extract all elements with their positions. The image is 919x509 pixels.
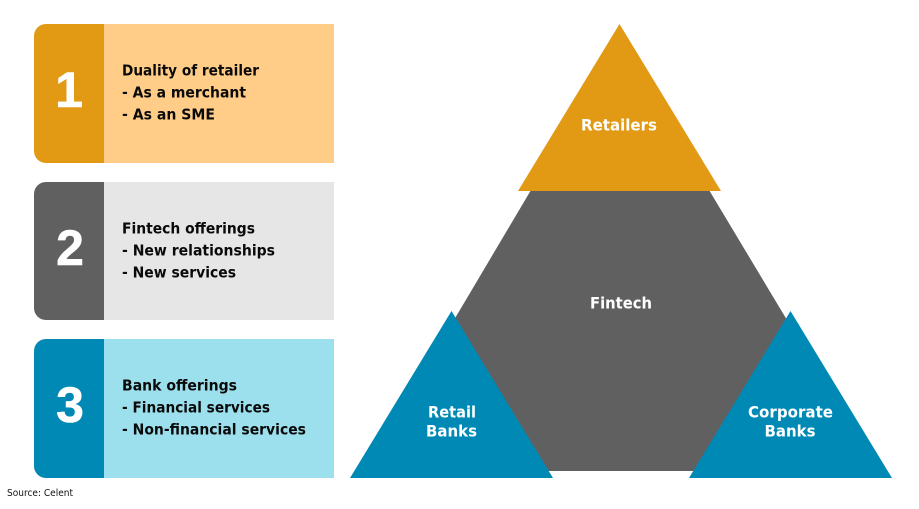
triangle: retailers <box>518 24 721 191</box>
triangle: retailers: Retailers <box>581 116 657 134</box>
text block: card 1 <box>122 62 260 124</box>
text block: card 1: - As a merchant <box>122 84 246 102</box>
text block: card 2: Fintech offerings <box>122 220 255 238</box>
text block: card 1: - As an SME <box>122 106 215 124</box>
triangle: retail banks <box>350 311 553 478</box>
panel: card 3 bank offerings <box>34 339 334 478</box>
text block: card 2 <box>122 220 275 282</box>
text block: card 3 <box>122 376 306 438</box>
panel: card 1 duality of retailer <box>34 24 334 163</box>
number badge 3: 3 <box>56 377 84 433</box>
triangle: retail banks: Retail <box>428 402 476 422</box>
panel: card 2 fintech offerings <box>34 182 334 320</box>
number badge 2: 2 <box>56 220 84 276</box>
source note: Source: Celent <box>7 488 73 499</box>
text block: card 3: - Financial services <box>122 398 270 416</box>
triangle: corporate banks: Corporate <box>748 402 833 422</box>
triangle: corporate banks: Banks <box>764 422 816 440</box>
triangle: corporate banks <box>689 311 892 478</box>
text block: card 2: - New services <box>122 264 236 282</box>
number badge 2 <box>34 182 104 320</box>
shape: fintech centre <box>451 185 790 471</box>
shape: fintech centre: Fintech <box>590 294 652 312</box>
number badge 1: 1 <box>55 62 83 118</box>
text block: card 3: - Non-financial services <box>122 420 306 438</box>
text block: card 3: Bank offerings <box>122 376 237 394</box>
diagram: fintech triangle <box>350 24 892 478</box>
triangle: retail banks: Banks <box>426 422 477 440</box>
number badge 1 <box>34 24 104 163</box>
text block: card 1: Duality of retailer <box>122 62 260 80</box>
text block: card 2: - New relationships <box>122 242 275 260</box>
number badge 3 <box>34 339 104 478</box>
